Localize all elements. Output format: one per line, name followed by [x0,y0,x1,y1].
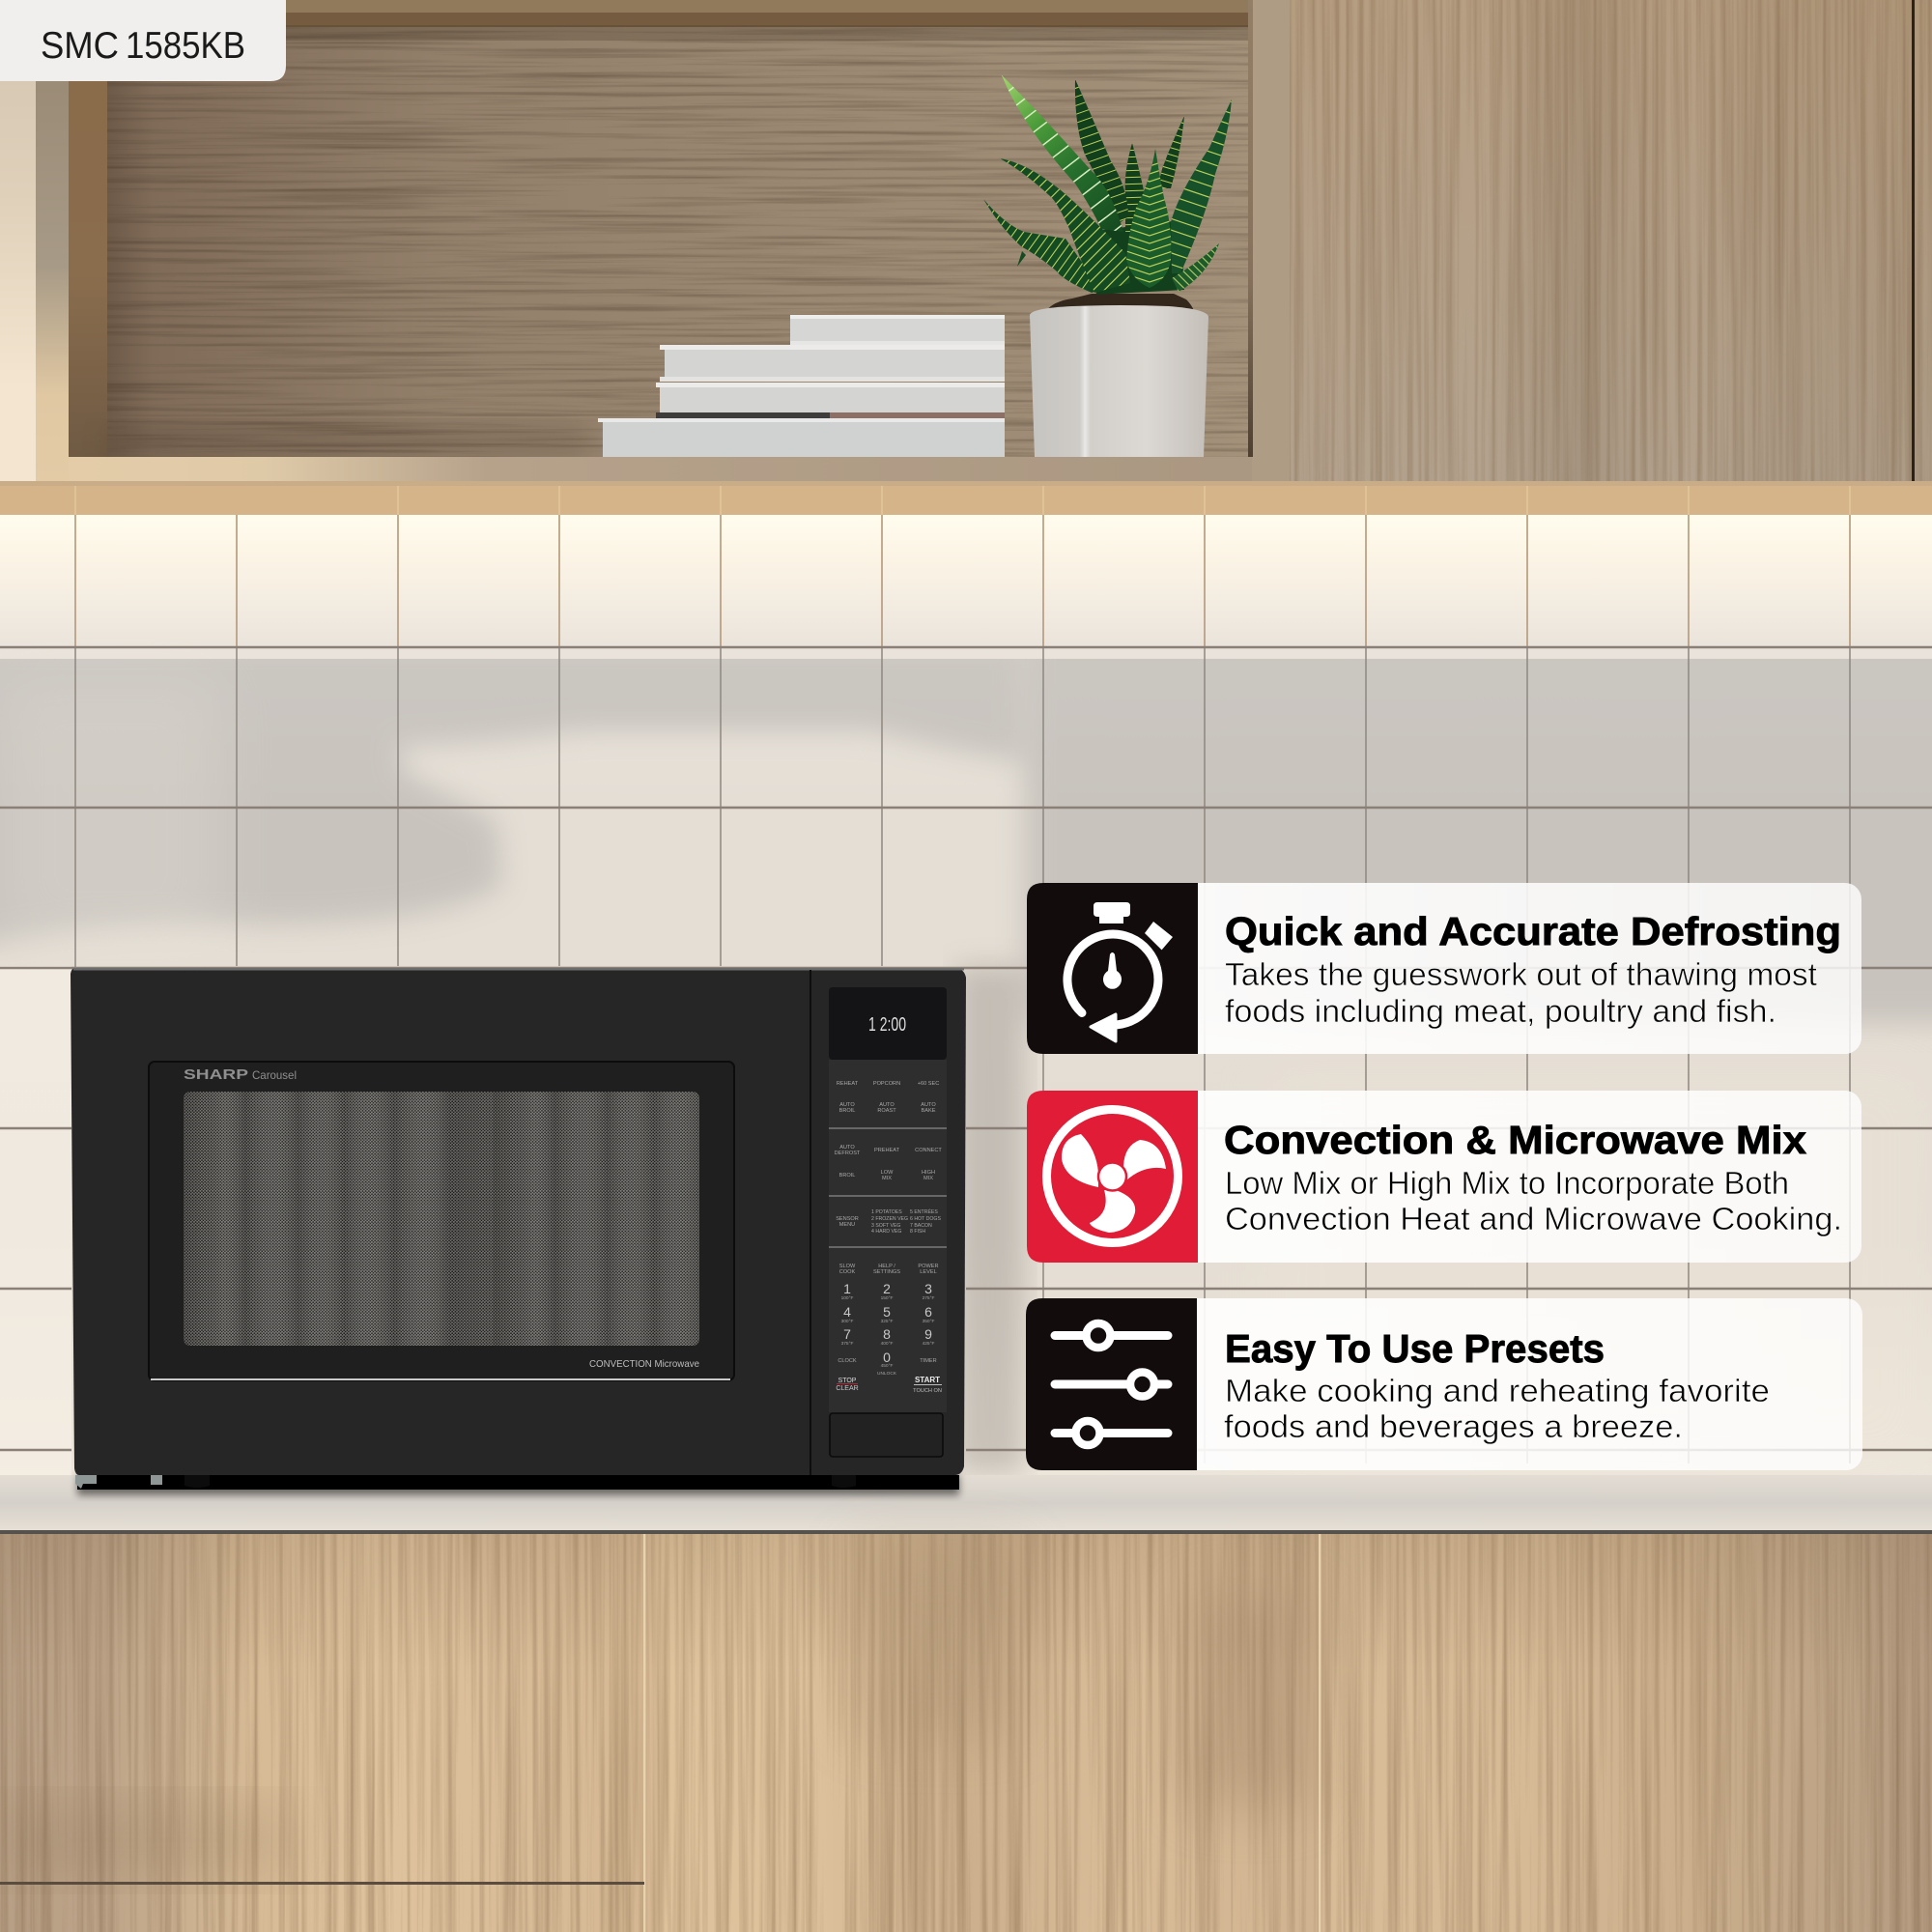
leaf narrow right [1160,116,1184,188]
pot [1030,305,1208,457]
plant core [1087,220,1184,295]
keypad labels: CLEAR [836,1385,859,1392]
keypad labels: REHEAT [837,1081,859,1087]
display [829,987,947,1060]
icon tile: stopwatch [1027,883,1198,1054]
feature card: quick and accurate defrosting [1027,883,1861,1054]
keypad labels: 9 [924,1326,932,1342]
background: countertop [0,1475,1932,1534]
keypad labels: 8 [883,1326,891,1342]
leaf central [1126,149,1171,288]
keypad labels [835,1081,942,1394]
keypad labels: DEFROST [835,1151,861,1156]
feature card: easy to use presets [1026,1298,1862,1470]
background: lit wood trim strip [0,486,1932,515]
keypad labels: MENU [839,1222,855,1228]
microwave [71,968,966,1489]
keypad labels: 450°F [881,1363,893,1369]
title: Convection & Microwave Mix [1224,1118,1806,1162]
keypad labels: 350°F [923,1319,934,1324]
model number: 1585KB [126,25,245,67]
keypad labels: HIGH [922,1170,935,1176]
left hinge [75,1475,162,1489]
model prefix: SMC [41,25,119,67]
keypad labels: 100°F [841,1295,853,1301]
door to panel divider [810,970,811,1475]
background: lower wood cabinet doors [0,1534,1932,1932]
books stack [598,315,1005,457]
keypad labels: MIX [882,1176,892,1181]
icon tile: sliders [1026,1298,1197,1470]
description [1225,956,1817,1029]
description: foods including meat, poultry and fish. [1225,993,1776,1029]
keypad labels: POWER [918,1264,939,1269]
keypad labels: 2 [883,1281,891,1296]
keypad labels: BAKE [922,1108,936,1114]
keypad labels: AUTO [839,1145,855,1151]
leaf lower left [983,199,1094,293]
description [1225,1165,1842,1236]
keypad labels: LEVEL [920,1269,937,1275]
keypad labels: 1 POTATOES [871,1209,902,1215]
keypad labels: MIX [923,1176,933,1181]
keypad labels: 3 [924,1281,932,1296]
description [1224,1373,1770,1444]
control panel [829,987,947,1457]
leaf left bright [1002,75,1122,232]
keypad labels: CLOCK [838,1358,857,1364]
keypad labels: BROIL [839,1108,855,1114]
cabinet body [71,968,966,1475]
keypad labels: CONNECT [915,1148,942,1153]
keypad labels: 5 [883,1304,891,1320]
keypad labels: 300°F [841,1319,853,1324]
keypad labels: 150°F [881,1295,893,1301]
small hook [1017,251,1026,267]
keypad labels: POPCORN [873,1081,900,1087]
background: tiled wall [0,515,1932,1481]
keypad labels: UNLOCK [877,1371,897,1377]
keypad labels: TOUCH ON [913,1388,942,1394]
keypad labels: HELP / [878,1264,895,1269]
brand logo: SHARP [184,1066,248,1083]
leaf mid left [1000,158,1130,293]
keypad labels: BROIL [839,1173,855,1179]
keypad labels: 3 SOFT VEG [871,1223,900,1229]
description: Make cooking and reheating favorite [1225,1373,1770,1408]
leaf tip far right [1172,243,1219,292]
keypad labels: COOK [839,1269,855,1275]
clock: 1 2:00 [868,1014,906,1036]
model label [0,0,286,81]
keypad labels: 7 BACON [910,1223,932,1229]
keypad labels: 4 [843,1304,851,1320]
keypad labels: 0 [883,1350,891,1365]
carousel wordmark: Carousel [252,1068,297,1082]
keypad labels: 400°F [881,1341,893,1347]
title: Quick and Accurate Defrosting [1225,909,1841,953]
title: Easy To Use Presets [1225,1326,1605,1371]
keypad labels: 6 HOT DOGS [910,1216,941,1222]
keypad labels: SENSOR [836,1216,859,1222]
description: Takes the guesswork out of thawing most [1225,956,1817,992]
keypad labels: 275°F [923,1295,934,1301]
keypad labels: 1 [843,1281,851,1296]
feet [185,1475,856,1488]
soil [1046,294,1194,311]
keypad labels: START [915,1376,940,1384]
window mesh [184,1092,699,1346]
keypad labels: 425°F [923,1341,934,1347]
keypad labels: AUTO [879,1102,895,1108]
keypad labels: 8 FISH [910,1229,925,1235]
keypad labels: 7 [843,1326,851,1342]
door open button [830,1413,943,1457]
door window frame [149,1062,734,1380]
keypad labels: LOW [881,1170,894,1176]
keypad labels: SETTINGS [873,1269,900,1275]
description: foods and beverages a breeze. [1224,1408,1683,1444]
stopwatch [1067,902,1173,1041]
keypad labels: AUTO [839,1102,855,1108]
keypad labels: ROAST [877,1108,896,1114]
leaf right long [1171,99,1232,273]
leaf tall [1074,79,1128,222]
keypad labels: 5 ENTRÉES [910,1208,938,1215]
plant in white pot [980,68,1236,457]
convection wordmark: CONVECTION Microwave [589,1358,699,1370]
sliders [1055,1323,1168,1445]
leaf narrow center [1124,143,1144,232]
feature card: convection and microwave mix [1027,1091,1861,1263]
keypad labels: 325°F [881,1319,893,1324]
keypad labels: +60 SEC [918,1081,939,1087]
keypad labels: STOP [838,1378,857,1384]
keypad labels: PREHEAT [874,1148,900,1153]
background: upper wood cabinet [0,0,1932,486]
icon tile: fan [1027,1091,1198,1263]
keypad labels: AUTO [921,1102,936,1108]
keypad labels: 2 FROZEN VEG [871,1216,908,1222]
keypad labels: 6 [924,1304,932,1320]
keypad labels: SLOW [839,1264,856,1269]
keypad labels: TIMER [920,1358,937,1364]
fan [1047,1109,1179,1242]
keypad labels: 375°F [841,1341,853,1347]
description: Convection Heat and Microwave Cooking. [1225,1201,1842,1236]
keypad labels: 4 HARD VEG [871,1229,901,1235]
description: Low Mix or High Mix to Incorporate Both [1225,1165,1789,1201]
